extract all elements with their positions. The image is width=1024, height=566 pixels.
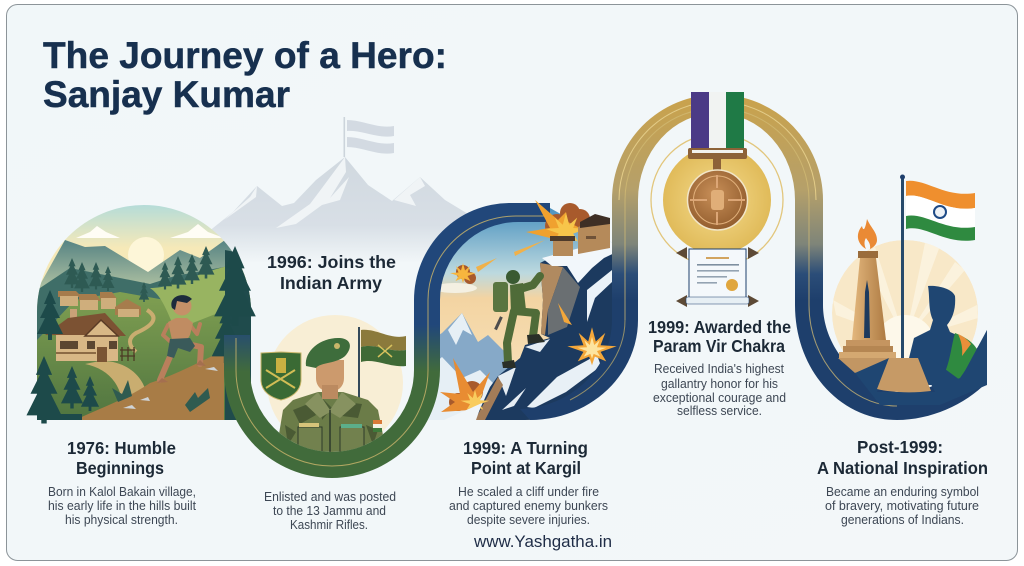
background mountains with faint flag [208, 117, 478, 262]
website credit: www.Yashgatha.in [473, 532, 612, 551]
title [43, 35, 447, 115]
ribbon: gold arch and navy bowl [520, 95, 987, 420]
ground navy [855, 330, 987, 405]
text: 1999 Param Vir Chakra: exceptional courage and [653, 391, 786, 405]
text: post-1999 National Inspiration: A National Inspiration [817, 458, 988, 478]
text: 1976 Humble Beginnings: Born in Kalol Bakain village, [48, 485, 196, 499]
panel: 1976 village illustration [26, 205, 256, 424]
regimental shield [261, 352, 301, 400]
main house [45, 309, 135, 362]
panel: 1996 soldier illustration [261, 315, 406, 455]
explosions and bunkers at cliff top [526, 200, 610, 256]
text: 1999 Turning Point at Kargil: despite severe injuries. [467, 513, 590, 527]
text: 1976 Humble Beginnings: Beginnings [76, 458, 164, 478]
text: post-1999 National Inspiration: Post-1999: [857, 437, 943, 457]
text: 1999 Turning Point at Kargil: 1999: A Turning [463, 438, 588, 458]
text: 1999 Param Vir Chakra: selfless service. [677, 404, 762, 418]
text: post-1999 National Inspiration [817, 437, 988, 527]
text: 1999 Turning Point at Kargil: and captured enemy bunkers [449, 499, 608, 513]
ribbon: green U and blue arch [224, 203, 550, 478]
panel: post-1999 memorial and flag [832, 174, 987, 405]
panel: 1999 Kargil cliff illustration [428, 208, 612, 420]
text: 1976 Humble Beginnings [48, 438, 197, 527]
eternal flame [858, 219, 877, 249]
text: post-1999 National Inspiration: generations of Indians. [841, 513, 964, 527]
citation scroll [676, 247, 759, 307]
text: 1976 Humble Beginnings: his early life in the hills built [48, 499, 197, 513]
flag pole [901, 178, 904, 358]
text: 1976 Humble Beginnings: 1976: Humble [67, 438, 176, 458]
text: post-1999 National Inspiration: of bravery, motivating future [825, 499, 979, 513]
text: 1999 Param Vir Chakra: Received India's highest [654, 362, 785, 376]
text: 1999 Turning Point at Kargil: Point at Kargil [471, 458, 581, 478]
small houses [58, 291, 141, 317]
climbing soldier [493, 270, 545, 368]
lower-left explosion [440, 358, 490, 420]
title: The Journey of a Hero: [43, 35, 447, 76]
foreground trees [26, 246, 256, 424]
foreground slope [82, 356, 224, 420]
text: post-1999 National Inspiration: Became an enduring symbol [826, 485, 979, 499]
sunrise circle [832, 240, 978, 358]
text: 1999 Turning Point at Kargil: He scaled a cliff under fire [458, 485, 599, 499]
text: 1996 Joins the Indian Army: Enlisted and was posted [264, 490, 396, 504]
text: 1996 Joins the Indian Army: Indian Army [280, 273, 382, 293]
faceless head [316, 360, 344, 392]
medal ribbon [688, 92, 747, 171]
memorial path [877, 358, 931, 392]
text: 1999 Param Vir Chakra: gallantry honor for his [661, 377, 778, 391]
war memorial [838, 251, 896, 373]
flag pole and regimental flag [358, 327, 406, 398]
right cliff explosion [558, 303, 617, 365]
uniform [278, 392, 384, 455]
silhouette [907, 286, 987, 388]
indian flag [906, 181, 975, 241]
panel: 1999 Param Vir Chakra medal [651, 92, 783, 307]
text: 1996 Joins the Indian Army [264, 252, 396, 532]
gold disc [663, 146, 771, 254]
tracer and mid-air explosion [450, 240, 545, 284]
text: 1996 Joins the Indian Army: 1996: Joins the [267, 252, 396, 272]
bronze medal [688, 170, 748, 230]
text: 1999 Param Vir Chakra: 1999: Awarded the [648, 317, 791, 337]
text: 1996 Joins the Indian Army: Kashmir Rifles. [290, 518, 368, 532]
boy figure [157, 295, 206, 383]
distant snowy mountains [440, 313, 508, 412]
text: 1999 Param Vir Chakra [648, 317, 791, 418]
halo ring [651, 134, 783, 266]
beret [306, 338, 350, 368]
text: 1996 Joins the Indian Army: to the 13 Jammu and [273, 504, 386, 518]
title: Sanjay Kumar [43, 74, 290, 115]
sun [128, 237, 164, 273]
text: 1999 Turning Point at Kargil [449, 438, 608, 527]
text: 1976 Humble Beginnings: his physical strength. [65, 513, 178, 527]
village path [85, 310, 153, 400]
text: 1999 Param Vir Chakra: Param Vir Chakra [653, 336, 785, 356]
cliff [478, 254, 612, 420]
bunkers [553, 241, 573, 256]
